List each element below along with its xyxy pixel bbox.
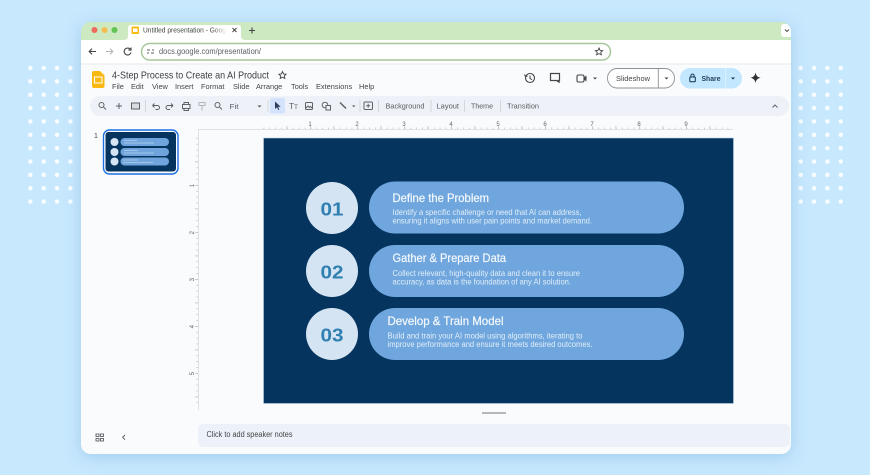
icon: slides logo [92, 71, 104, 88]
toolbar text buttons [386, 103, 538, 110]
menu bar [112, 84, 374, 90]
icon: version history [524, 74, 534, 82]
toolbar [90, 96, 789, 116]
step 3: Develop & Train Model [388, 314, 504, 328]
menu bar: Arrange [256, 82, 282, 91]
menu bar: Insert [175, 82, 193, 91]
step 1 [306, 182, 684, 234]
toolbar text buttons: Background [386, 102, 425, 110]
toolbar text buttons: Layout [436, 102, 459, 110]
slide [264, 138, 734, 404]
slides header [92, 68, 761, 91]
menu bar: Tools [291, 82, 309, 91]
background dot pattern left [24, 61, 77, 208]
horizontal ruler [198, 122, 733, 130]
horizontal ruler: 6 [543, 122, 547, 128]
icon: meet camera [577, 75, 597, 82]
horizontal ruler: 4 [449, 122, 453, 128]
speaker notes: Click to add speaker notes [206, 430, 293, 439]
step 2: 02 [320, 262, 344, 282]
active tab [124, 25, 245, 40]
document title: 4-Step Process to Create an AI Product [112, 70, 269, 82]
slide thumbnail [94, 130, 178, 174]
menu bar: File [112, 82, 124, 91]
slideshow button [608, 68, 674, 88]
insert icons: T [294, 104, 298, 111]
icon: star [279, 72, 286, 78]
icon: gemini spark [750, 72, 761, 83]
horizontal ruler: 1 [308, 122, 312, 128]
horizontal ruler: 9 [684, 122, 688, 128]
horizontal ruler: 7 [590, 122, 594, 128]
speaker notes [198, 424, 790, 447]
address field: docs.google.com/presentation/ [159, 47, 262, 56]
step 2: Collect relevant, high-quality data and clean it to ensure [392, 269, 581, 278]
menu bar: Format [201, 82, 224, 91]
zoom selector [230, 104, 262, 109]
share button: Share [702, 74, 720, 83]
step 3: improve performance and ensure it meets desired outcomes. [388, 340, 592, 349]
menu bar: Edit [131, 82, 144, 91]
zoom selector: Fit [230, 102, 239, 111]
tab list button [781, 24, 791, 37]
select tool highlighted [270, 98, 285, 114]
step 2: Gather & Prepare Data [392, 251, 506, 265]
browser tab bar [81, 22, 793, 40]
background dot pattern right [794, 61, 847, 208]
horizontal ruler: 5 [496, 122, 500, 128]
slide thumbnail: 1 [94, 133, 98, 140]
address bar row [81, 42, 791, 64]
slideshow button: Slideshow [616, 74, 650, 83]
step 2 [306, 245, 684, 297]
insert icons [289, 101, 372, 111]
icon: grid view [96, 434, 104, 441]
icon: comments [550, 74, 560, 82]
navigation buttons [89, 48, 131, 55]
horizontal ruler: 2 [355, 122, 359, 128]
step 1: Identify a specific challenge or need that AI can address, [392, 208, 582, 217]
vertical ruler: 3 [190, 277, 196, 281]
toolbar edit icons [99, 102, 222, 110]
toolbar text buttons: Transition [507, 102, 539, 110]
menu bar: Extensions [316, 82, 352, 91]
menu bar: Help [359, 82, 374, 91]
toolbar text buttons: Theme [471, 102, 493, 110]
step 1: ensuring it aligns with user pain points and market demand. [392, 216, 592, 226]
step 3: 03 [320, 324, 344, 346]
step 3: Build and train your AI model using algorithms, iterating to [388, 332, 583, 341]
menu bar: View [152, 82, 169, 91]
insert icons: T [289, 101, 294, 111]
address field [142, 44, 610, 60]
share button [680, 68, 742, 88]
browser window [81, 22, 793, 454]
step 1: 01 [320, 198, 344, 220]
menu bar: Slide [233, 82, 249, 91]
vertical ruler: 2 [190, 230, 196, 234]
vertical ruler: 1 [190, 183, 196, 187]
toolbar separators [146, 100, 500, 112]
active tab: Untitled presentation - Goog [143, 25, 226, 34]
vertical ruler: 4 [190, 324, 196, 328]
vertical ruler [190, 130, 198, 410]
icon: collapse panel [123, 435, 125, 440]
horizontal ruler: 3 [402, 122, 406, 128]
window controls [92, 27, 118, 33]
notes resize handle [482, 412, 506, 414]
new tab button [249, 28, 255, 34]
vertical ruler: 5 [190, 371, 196, 375]
step 1: Define the Problem [392, 191, 489, 205]
step 3 [306, 308, 684, 360]
collapse chevron [772, 105, 778, 108]
horizontal ruler: 8 [637, 122, 641, 128]
step 2: accuracy, as data is the foundation of any AI solution. [392, 278, 571, 286]
